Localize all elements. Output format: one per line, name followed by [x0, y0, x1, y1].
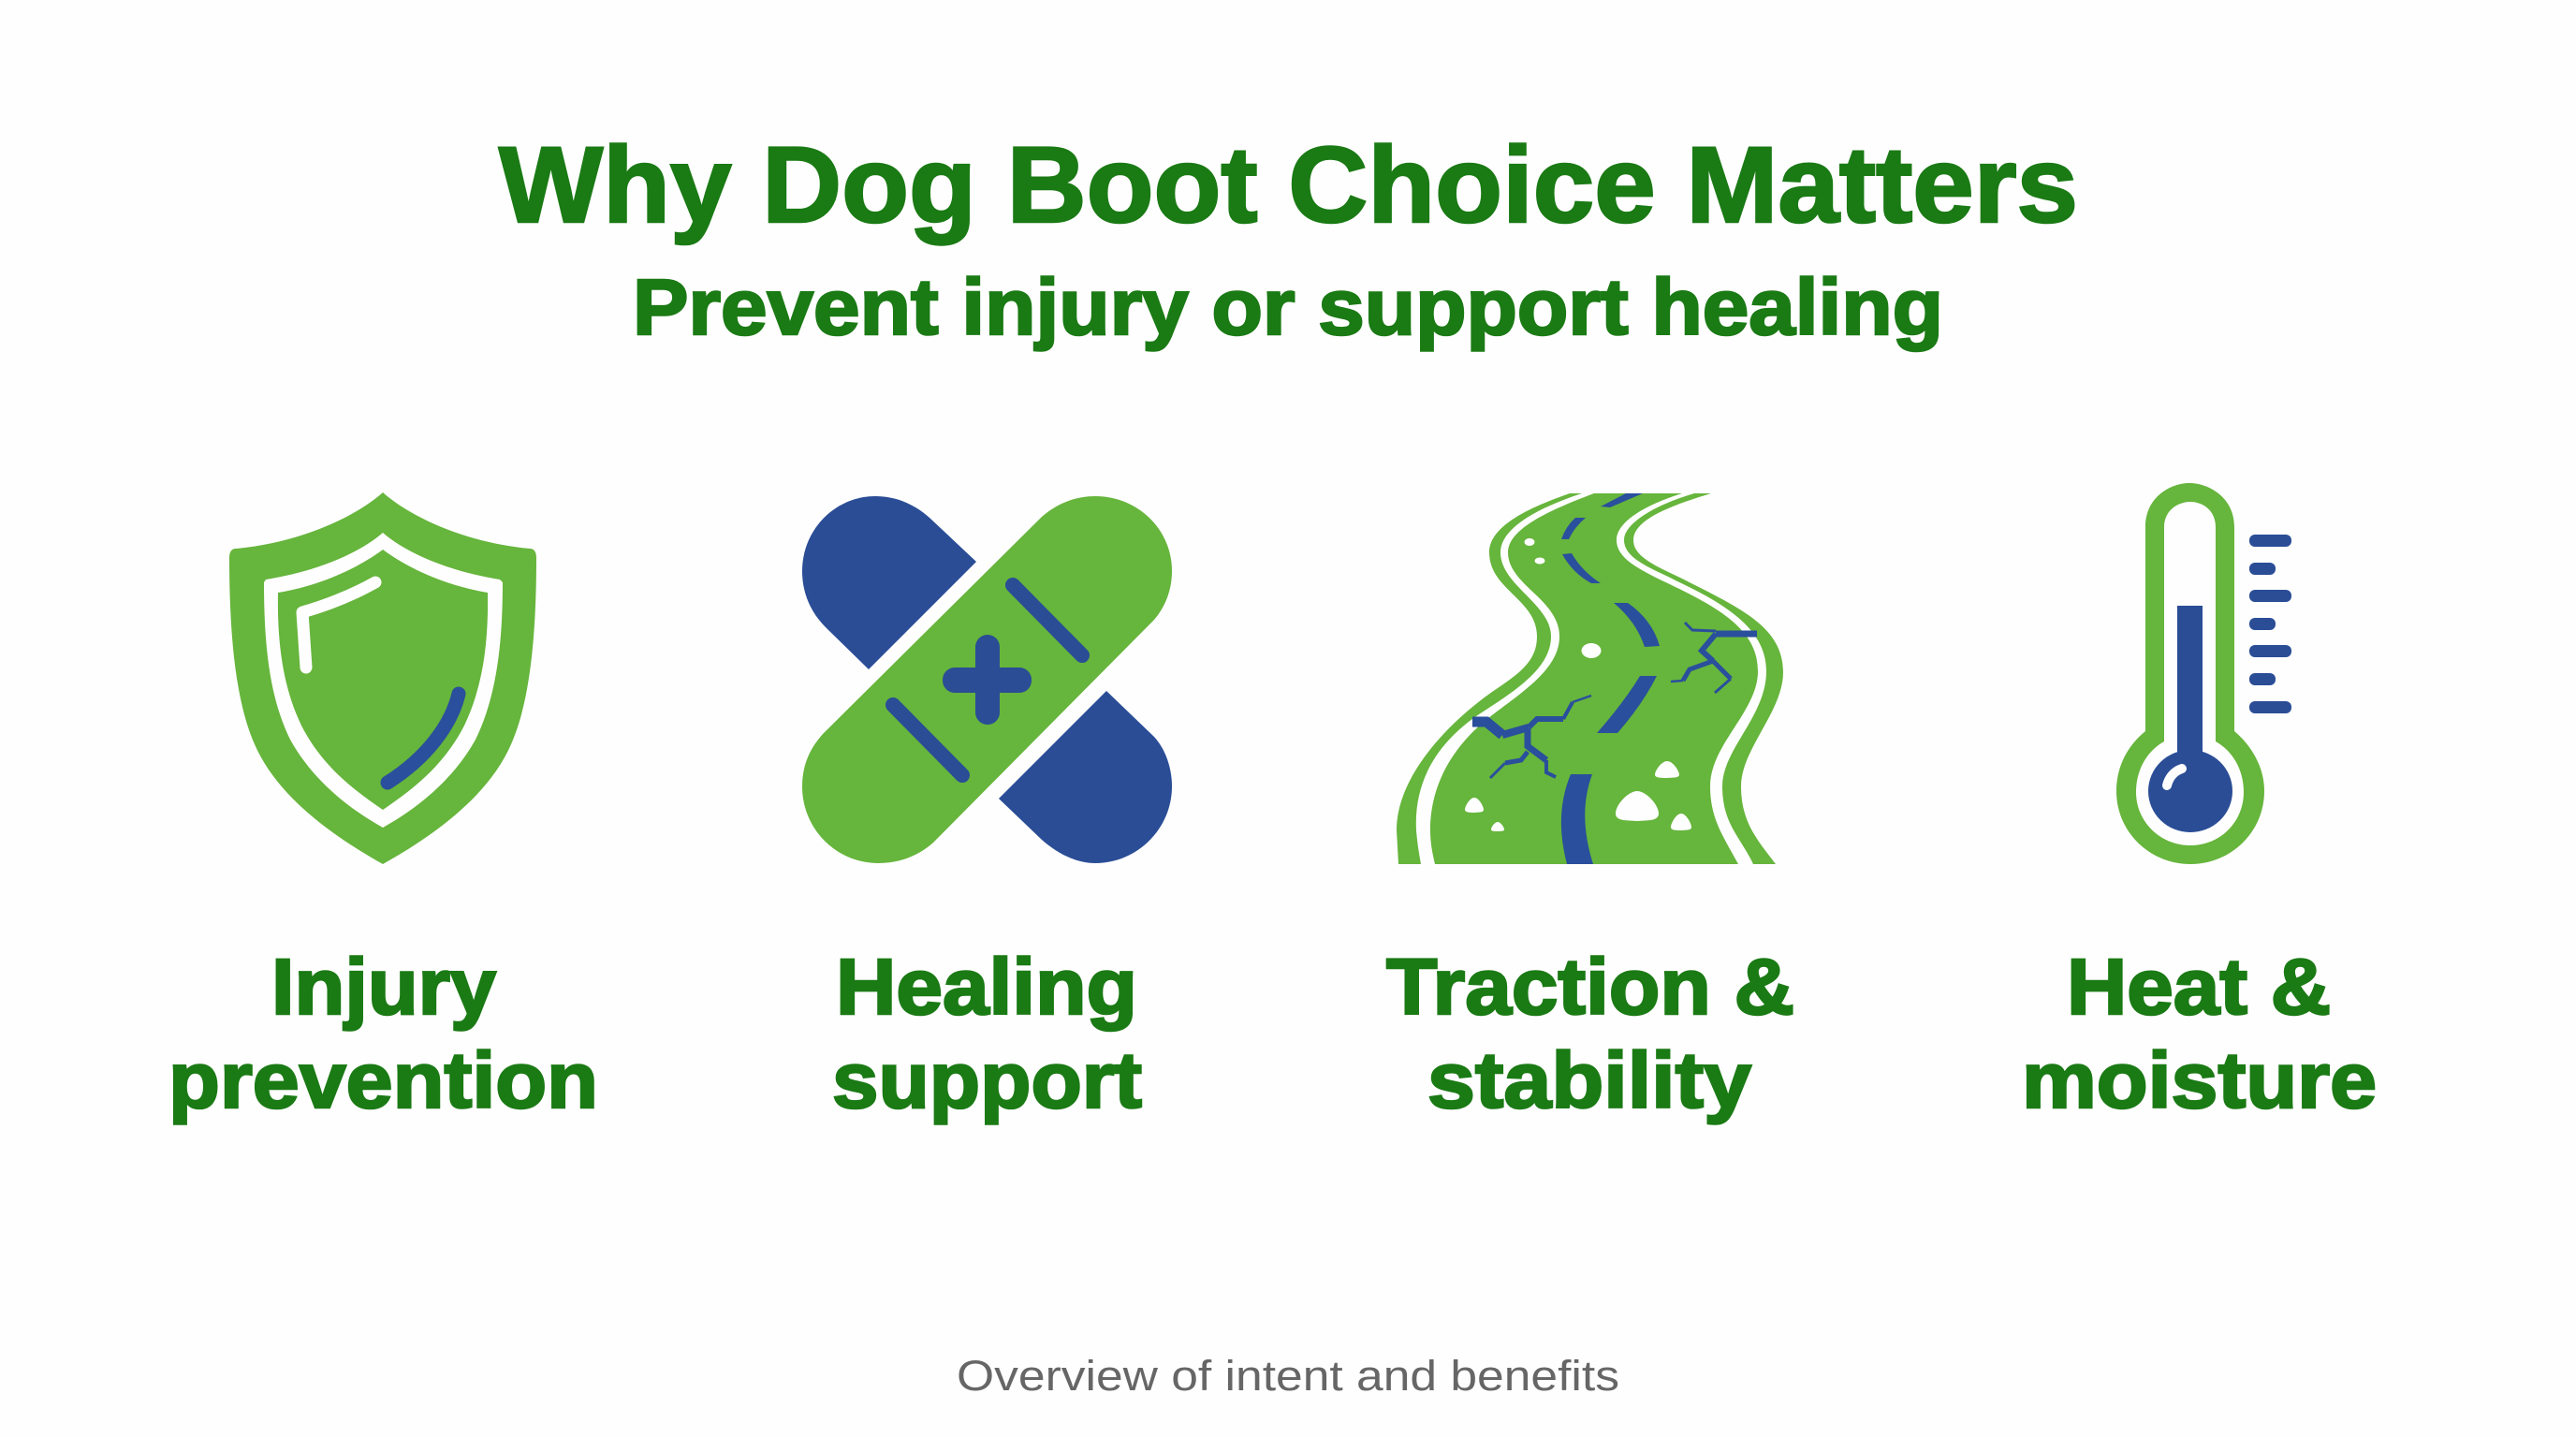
bandage green strip [802, 496, 1172, 863]
thermometer blue bulb [2148, 750, 2232, 832]
icon: shield [229, 492, 536, 864]
thermometer white interior [2136, 502, 2244, 845]
bandage blue top-left end [802, 496, 976, 669]
icon: cracked road [1397, 493, 1783, 864]
label: healing support: Healing [836, 943, 1137, 1031]
icon: bandage [802, 496, 1172, 863]
thermometer green casing [2116, 483, 2264, 864]
label: heat and moisture: moisture [2022, 1036, 2377, 1124]
shield white border [264, 533, 503, 828]
shield body [229, 492, 536, 864]
label: heat and moisture [2022, 943, 2377, 1124]
road surface [1397, 493, 1783, 864]
icon: thermometer [2116, 483, 2291, 864]
bandage blue plus [943, 635, 1032, 725]
shield white highlight [302, 582, 375, 668]
thermometer bulb highlight [2167, 769, 2182, 785]
road cracks [1472, 623, 1757, 778]
bandage blue bottom-right end [999, 691, 1172, 863]
road right white edge line [1617, 493, 1766, 864]
thermometer scale ticks [2249, 535, 2291, 713]
label: traction and stability: stability [1427, 1036, 1751, 1124]
label: injury prevention: Injury [271, 943, 496, 1031]
thermometer blue column [2177, 606, 2203, 765]
bandage upper slash [1013, 585, 1082, 655]
bandage lower slash [893, 705, 962, 775]
title: Why Dog Boot Choice Matters [499, 125, 2078, 245]
label: traction and stability: Traction & [1386, 943, 1794, 1031]
label: healing support [832, 943, 1142, 1124]
label: traction and stability [1386, 943, 1794, 1124]
label: healing support: support [832, 1036, 1142, 1124]
label: heat and moisture: Heat & [2067, 943, 2331, 1031]
subtitle: Prevent injury or support healing [633, 263, 1943, 351]
shield inner field [278, 550, 488, 810]
road left white edge line [1416, 493, 1594, 864]
label: injury prevention: prevention [168, 1036, 598, 1124]
label: injury prevention [168, 943, 598, 1124]
footer caption: Overview of intent and benefits [957, 1352, 1619, 1400]
shield blue accent [388, 694, 459, 783]
road centre dashes [1561, 493, 1660, 864]
road rocks [1465, 538, 1691, 831]
